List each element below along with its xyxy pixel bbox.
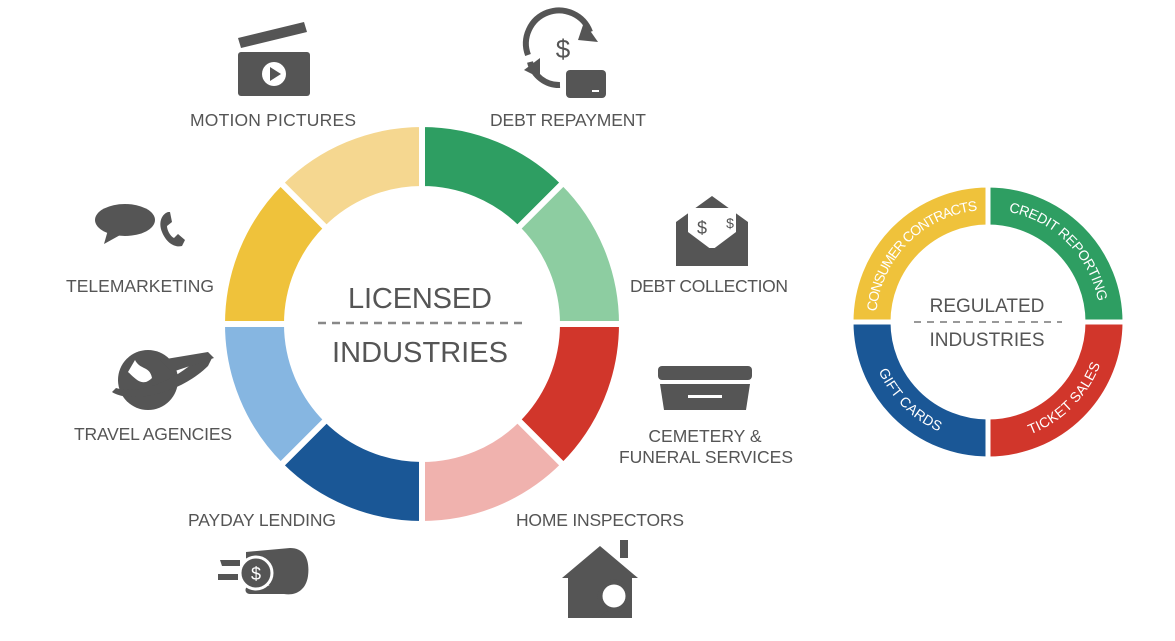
regulated donut: CONSUMER CONTRACTS (867, 201, 977, 310)
icon: hand with coin (218, 548, 308, 594)
center title: regulated industries: INDUSTRIES (929, 330, 1045, 351)
labels: TRAVEL AGENCIES (74, 424, 232, 444)
labels: FUNERAL SERVICES (619, 447, 793, 467)
labels: HOME INSPECTORS (516, 510, 684, 530)
regulated donut: TICKET SALES (1027, 362, 1100, 433)
labels: MOTION PICTURES (190, 110, 356, 130)
icon: debt repayment (524, 10, 606, 98)
regulated donut (854, 188, 1122, 456)
icon: clapboard (238, 22, 310, 96)
center title: regulated industries (914, 296, 1062, 351)
center title: licensed industries: LICENSED (348, 283, 492, 315)
icon: debt repayment: $ (556, 34, 571, 64)
labels: CEMETERY & (648, 426, 762, 446)
icon: speech bubble and phone (95, 204, 185, 246)
labels (66, 110, 793, 530)
icon: casket (658, 366, 752, 410)
center title: licensed industries: INDUSTRIES (332, 337, 508, 369)
labels: DEBT REPAYMENT (490, 110, 646, 130)
labels: PAYDAY LENDING (188, 510, 336, 530)
regulated donut: CREDIT REPORTING (1010, 203, 1107, 300)
icon: house with magnifier (562, 540, 638, 618)
icon: envelope with money (676, 196, 748, 266)
labels: DEBT COLLECTION (630, 276, 788, 296)
regulated donut: GIFT CARDS (880, 368, 942, 430)
main donut: licensed industries (222, 124, 622, 524)
icon: globe and plane (112, 350, 214, 410)
icon: hand with coin: $ (251, 564, 261, 584)
labels: TELEMARKETING (66, 276, 214, 296)
center title: licensed industries (318, 283, 526, 369)
icon: envelope with money: $ (726, 215, 734, 231)
icon: envelope with money: $ (697, 218, 707, 238)
center title: regulated industries: REGULATED (930, 296, 1044, 317)
